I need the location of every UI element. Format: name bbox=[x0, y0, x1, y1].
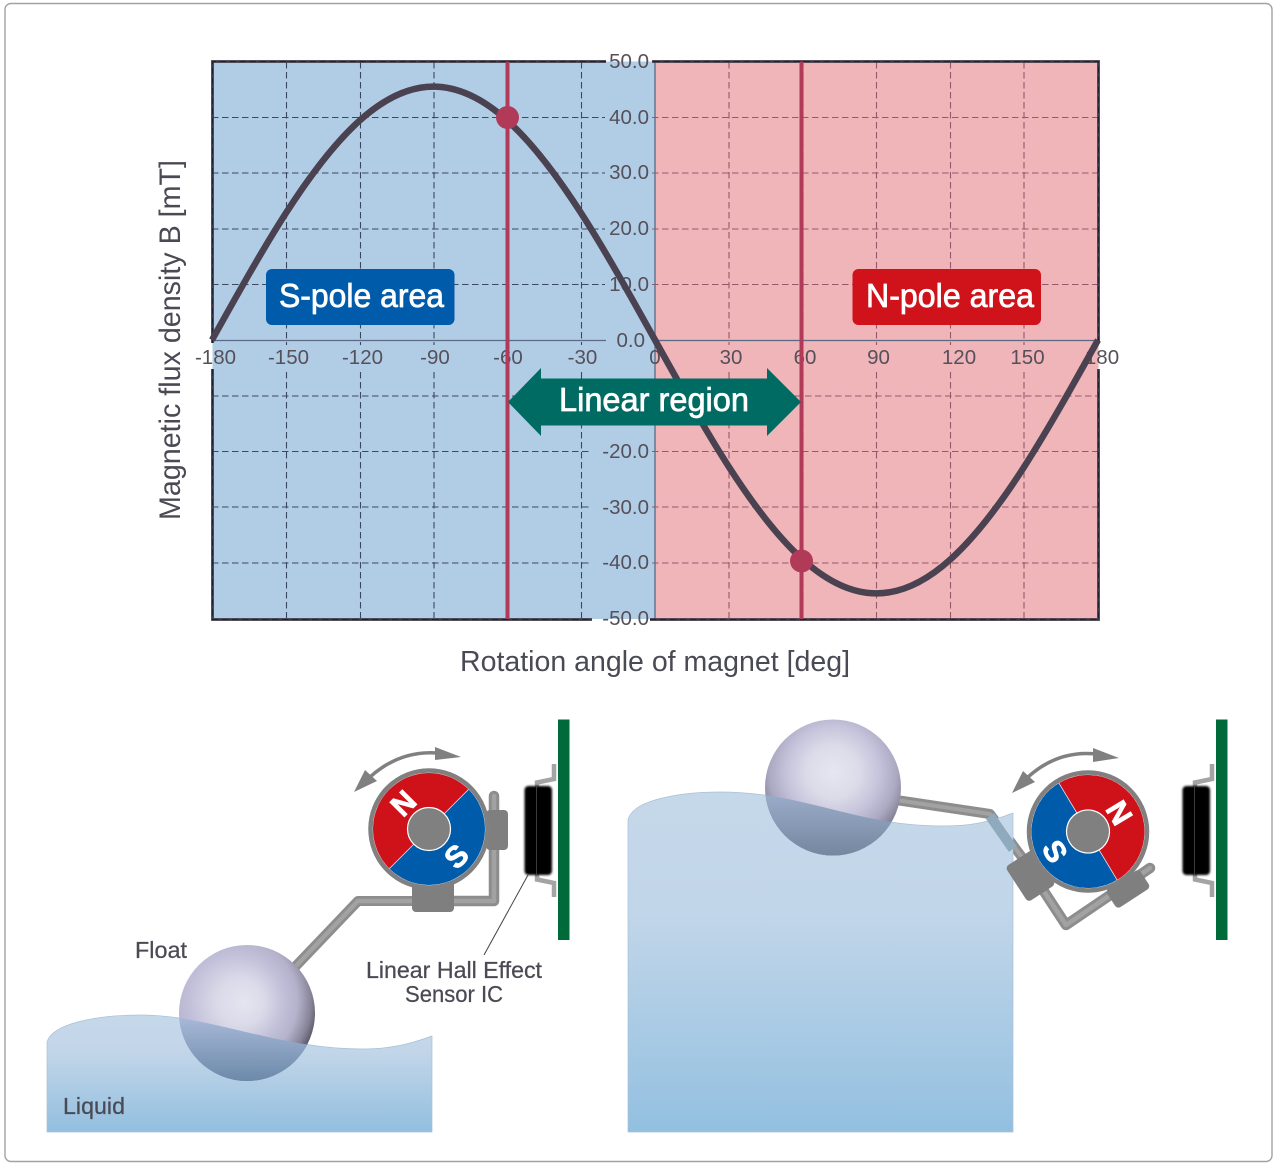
mount block bottom bbox=[412, 879, 454, 912]
label: float: Float bbox=[135, 937, 188, 963]
float ball bbox=[765, 720, 901, 856]
sensor leads bbox=[537, 764, 554, 897]
label: sensor: Sensor IC bbox=[405, 981, 503, 1007]
circuit board bbox=[558, 720, 570, 940]
y axis tick labels: 30.0 bbox=[609, 161, 649, 184]
x axis tick labels: -30 bbox=[568, 346, 597, 369]
x axis tick labels bbox=[195, 346, 1119, 369]
plot border bbox=[212, 62, 1098, 620]
sensor IC seam bbox=[1194, 785, 1196, 876]
x axis tick labels: 90 bbox=[867, 346, 890, 369]
x axis tick labels: 120 bbox=[942, 346, 976, 369]
magnet assembly bbox=[350, 750, 508, 912]
liquid bbox=[628, 792, 1013, 1132]
y axis tick labels: 40.0 bbox=[609, 106, 649, 129]
arrow: linear region: Linear region bbox=[559, 381, 749, 418]
float arm bbox=[896, 800, 1030, 868]
circuit board bbox=[1216, 720, 1228, 940]
magnet ring bbox=[1029, 772, 1147, 890]
y axis title: Magnetic flux density B [mT] bbox=[154, 160, 187, 520]
hall effect sensor IC bbox=[524, 786, 552, 875]
x axis tick labels: 180 bbox=[1085, 346, 1119, 369]
label: N-pole area: N-pole area bbox=[866, 277, 1035, 314]
mount rod bbox=[1030, 868, 1150, 925]
panel: N-pole area background bbox=[655, 62, 1098, 619]
x axis tick labels: -60 bbox=[493, 346, 523, 369]
liquid bbox=[47, 1015, 432, 1132]
x axis tick labels: 150 bbox=[1010, 346, 1045, 369]
mount block lower left bbox=[1005, 849, 1056, 902]
y axis tick labels bbox=[602, 50, 649, 630]
marker: -40 mT at +60 deg bbox=[790, 550, 813, 572]
flux density sine curve bbox=[212, 87, 1098, 593]
label: liquid: Liquid bbox=[63, 1093, 125, 1119]
y axis tick labels: 20.0 bbox=[609, 217, 649, 240]
label: N-pole area bbox=[852, 269, 1041, 325]
chart: flux density vs rotation angle bbox=[154, 50, 1119, 678]
hall effect sensor IC bbox=[1182, 786, 1210, 875]
label: S-pole area bbox=[266, 269, 454, 325]
x axis title: Rotation angle of magnet [deg] bbox=[460, 646, 850, 678]
y axis tick labels: -40.0 bbox=[602, 551, 649, 574]
float ball submerged part bbox=[766, 795, 891, 856]
mount block lower right bbox=[1105, 869, 1151, 909]
submerged arm bbox=[990, 816, 1013, 849]
label: sensor bbox=[366, 957, 543, 1007]
rotating magnet: S bbox=[438, 838, 476, 876]
rotating magnet bbox=[1010, 754, 1166, 909]
rotating magnet: N bbox=[1099, 795, 1138, 831]
x axis tick labels: -120 bbox=[342, 346, 383, 369]
diagram: low liquid level bbox=[47, 720, 570, 1132]
rotation arrow bbox=[354, 747, 461, 792]
linear region boundary lines bbox=[508, 62, 802, 619]
leader line bbox=[484, 875, 528, 955]
x axis tick labels: -90 bbox=[420, 346, 450, 369]
y axis tick labels: 10.0 bbox=[609, 273, 649, 296]
float ball bbox=[179, 945, 315, 1081]
y axis tick labels: -30.0 bbox=[602, 496, 649, 519]
y axis tick labels: 0.0 bbox=[616, 329, 645, 352]
rotating magnet: S bbox=[1035, 835, 1073, 869]
float arm bbox=[294, 901, 433, 968]
magnet assembly bbox=[1010, 754, 1166, 909]
label: sensor: Linear Hall Effect bbox=[366, 957, 543, 983]
rotating magnet: N bbox=[385, 785, 423, 823]
marker: +40 mT at -60 deg bbox=[496, 106, 519, 129]
x axis tick labels: 0 bbox=[649, 346, 661, 369]
panel: S-pole area background bbox=[212, 62, 655, 619]
y axis tick labels: -50.0 bbox=[602, 607, 649, 630]
x axis tick labels: -150 bbox=[268, 346, 309, 369]
float ball submerged part bbox=[179, 1018, 307, 1081]
sensor IC seam bbox=[536, 785, 538, 876]
mount rod bbox=[419, 796, 494, 901]
y axis tick labels: -20.0 bbox=[602, 440, 649, 463]
sensor leads bbox=[1195, 764, 1212, 897]
x axis tick labels: 30 bbox=[720, 346, 742, 369]
magnet ring bbox=[370, 770, 488, 888]
x axis tick labels: -180 bbox=[195, 346, 236, 369]
arrow: linear region bbox=[508, 368, 801, 436]
y axis tick labels: 50.0 bbox=[609, 50, 649, 73]
rotating magnet bbox=[350, 750, 508, 908]
rotation arrow bbox=[1012, 748, 1119, 793]
label: S-pole area: S-pole area bbox=[279, 277, 445, 314]
mount block right bbox=[486, 810, 508, 850]
axis lines bbox=[212, 62, 1098, 619]
x axis tick labels: 60 bbox=[794, 346, 816, 369]
diagram: high liquid level bbox=[628, 720, 1228, 1132]
